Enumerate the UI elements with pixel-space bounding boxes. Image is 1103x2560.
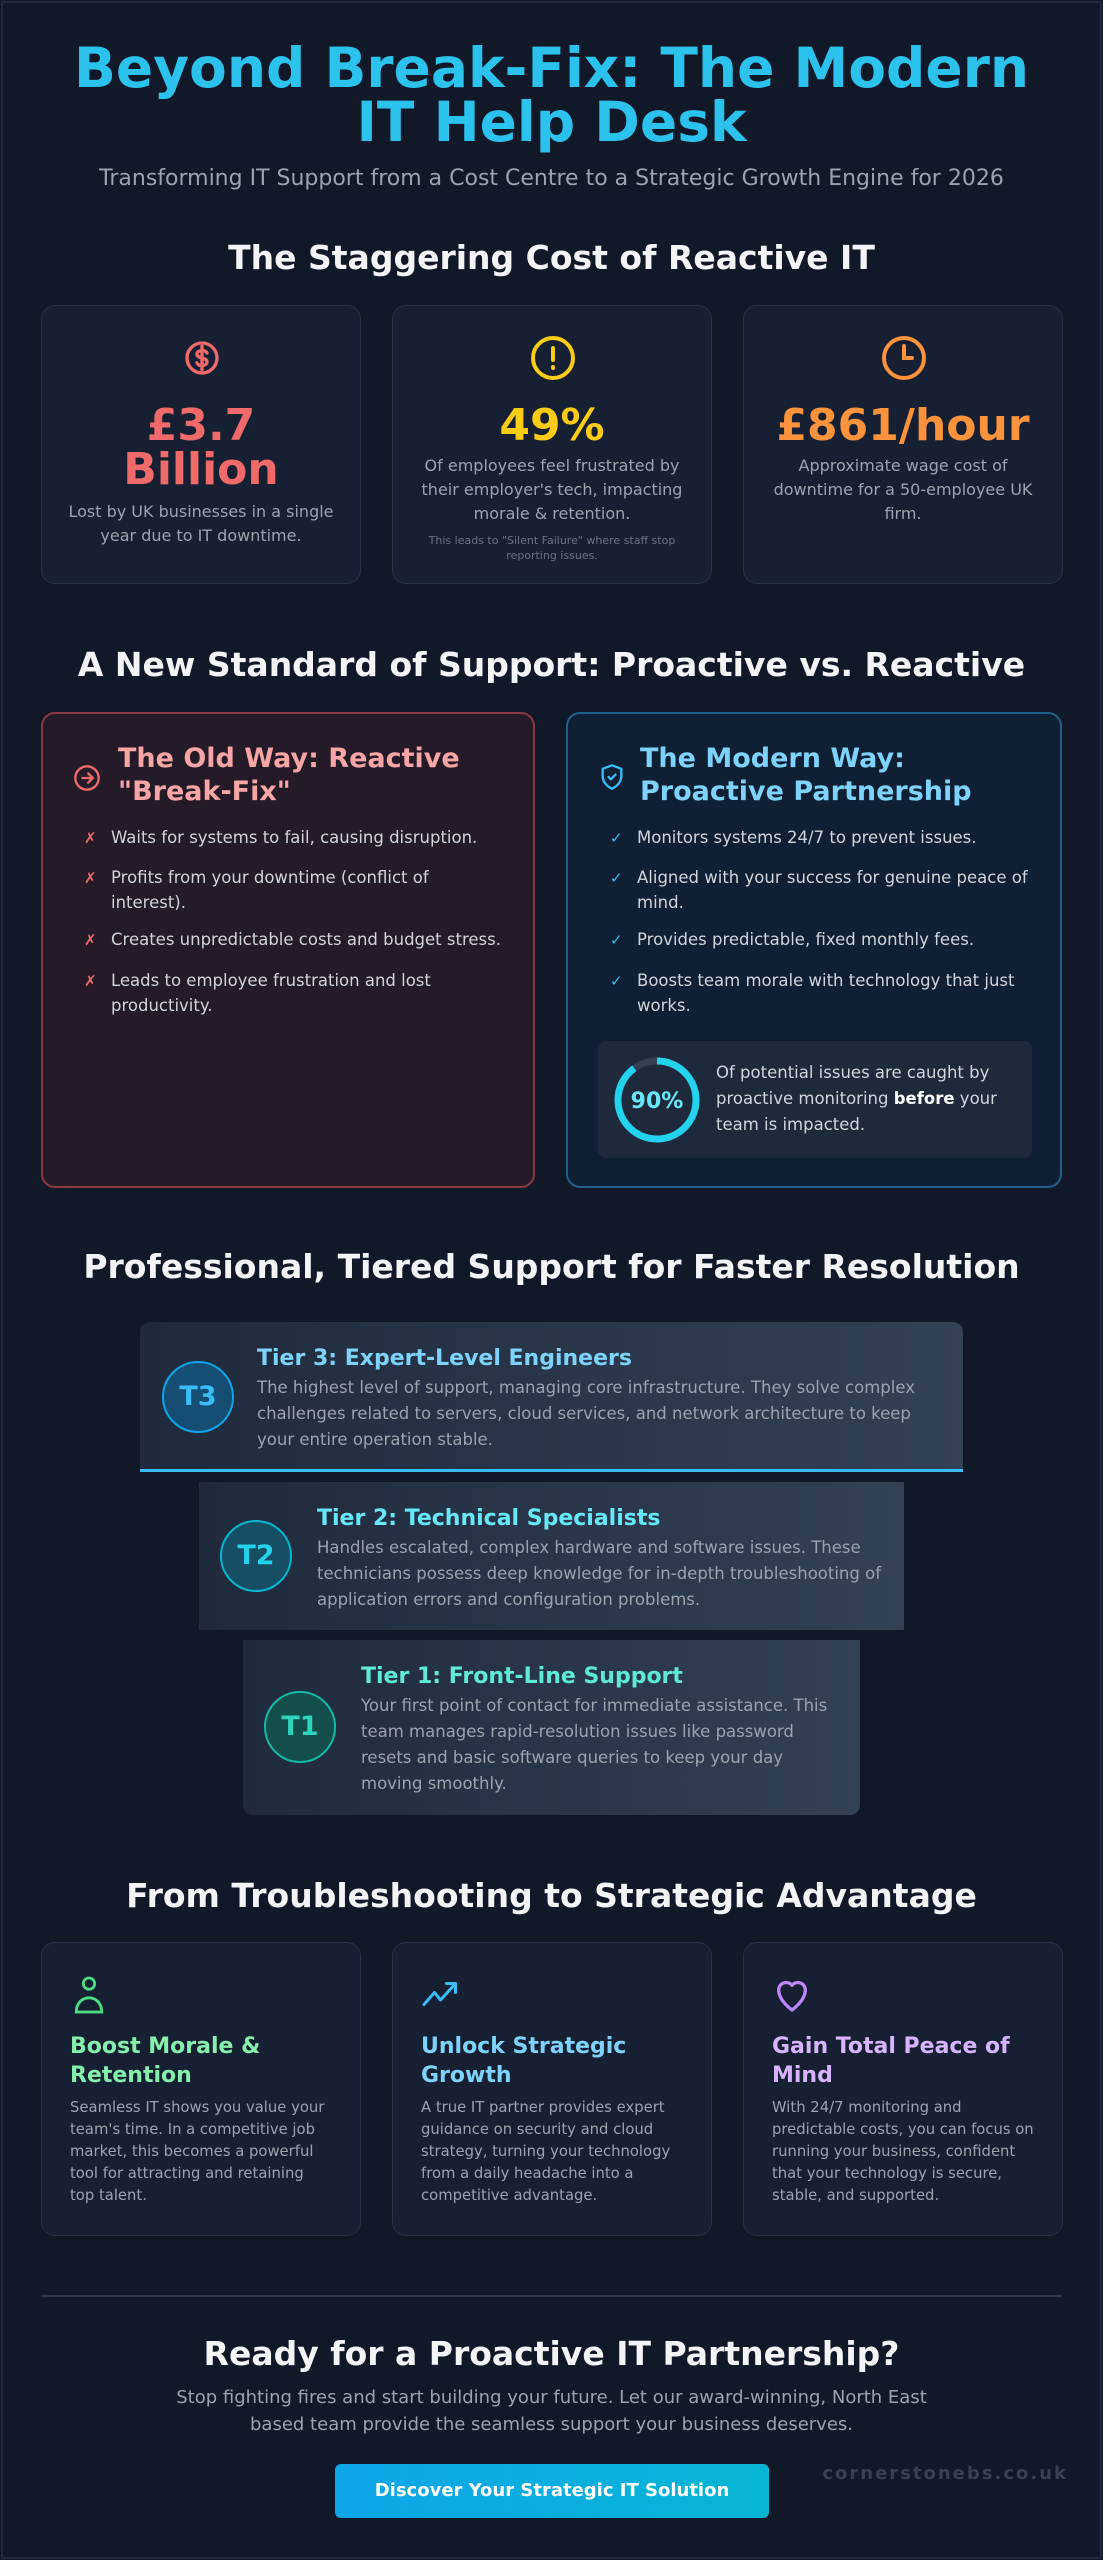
- panel: old way: Leads to employee frustration and lost productivity.: [111, 971, 431, 1015]
- panel: modern way: ✓: [610, 972, 623, 990]
- tier 1: T1: [281, 1711, 319, 1742]
- panel: old way: ✗: [84, 972, 97, 990]
- heading: strategic advantage: From Troubleshooting to Strategic Advantage: [126, 1876, 977, 1915]
- subtitle: Transforming IT Support from a Cost Centre to a Strategic Growth Engine for 2026: [99, 166, 1004, 191]
- benefit card: peace of mind: Mind: [772, 2063, 833, 2088]
- benefit card: growth: [392, 1942, 712, 2236]
- tier 3: [140, 1322, 963, 1472]
- CTA button: Discover Your Strategic IT Solution: [375, 2480, 729, 2501]
- tier 3: T3: [179, 1381, 217, 1412]
- title: IT Help Desk: [356, 90, 747, 154]
- benefit card: peace of mind: Gain Total Peace of: [772, 2034, 1010, 2059]
- panel: old way: [41, 712, 535, 1188]
- tier 2: Handles escalated, complex hardware and software issues. These technicians possess deep knowledge for in-depth troubleshooting of application errors and configuration problems.: [317, 1538, 881, 1609]
- title: Beyond Break-Fix: The Modern: [74, 36, 1029, 100]
- tier 1: Your first point of contact for immediate assistance. This team manages rapid-resolution issues like password resets and basic software queries to keep your day moving smoothly.: [361, 1696, 827, 1793]
- panel: old way: Waits for systems to fail, causing disruption.: [111, 828, 477, 847]
- benefit card: growth: Unlock Strategic: [421, 2034, 626, 2059]
- footer: website: cornerstonebs.co.uk: [822, 2463, 1068, 2484]
- stat card: 49%: This leads to "Silent Failure" where staff stop reporting issues.: [429, 534, 675, 562]
- chart: 90% ring: [614, 1058, 700, 1142]
- tier 2: [199, 1482, 904, 1630]
- icon: arrow circle: [74, 765, 100, 791]
- stat card: 49%: Of employees feel frustrated by their employer's tech, impacting morale & retention.: [422, 456, 682, 523]
- stat card: 3.7 billion: Lost by UK businesses in a single year due to IT downtime.: [68, 502, 334, 545]
- panel: old way: ✗: [84, 869, 97, 887]
- benefit card: morale: Seamless IT shows you value your team's time. In a competitive job market, this becomes a powerful tool for attracting and retaining top talent.: [70, 2099, 324, 2204]
- benefit card: morale: [41, 1942, 361, 2236]
- stat card: 49%: 49%: [499, 400, 605, 451]
- stat card: 3.7 billion: [41, 305, 361, 584]
- heading: cost of reactive IT: The Staggering Cost of Reactive IT: [228, 238, 875, 277]
- title: [74, 36, 1029, 154]
- panel: modern way: Monitors systems 24/7 to prevent issues.: [637, 828, 977, 847]
- stat card: 861/hour: £861/hour: [776, 400, 1030, 451]
- tier 2: Tier 2: Technical Specialists: [317, 1506, 660, 1531]
- panel: modern way: Proactive Partnership: [640, 776, 972, 807]
- CTA text: Stop fighting fires and start building your future. Let our award-winning, North East based team provide the seamless support your business deserves.: [176, 2387, 927, 2435]
- stat card: 861/hour: Approximate wage cost of downtime for a 50-employee UK firm.: [774, 456, 1032, 523]
- benefit card: growth: A true IT partner provides expert guidance on security and cloud strategy, turning your technology from a daily headache into a competitive advantage.: [421, 2099, 670, 2204]
- stat card: 49%: [392, 305, 712, 584]
- icon: alert: [531, 336, 575, 380]
- panel: modern way: ✓: [610, 829, 623, 847]
- chart: 90% ring: 90%: [631, 1089, 683, 1114]
- panel: old way: Creates unpredictable costs and budget stress.: [111, 930, 501, 949]
- panel: modern way: Aligned with your success for genuine peace of mind.: [637, 868, 1028, 912]
- CTA button: [335, 2464, 769, 2518]
- panel: modern way: The Modern Way:: [640, 743, 905, 774]
- panel: modern way: ✓: [610, 931, 623, 949]
- icon: person: [74, 1976, 104, 2014]
- tier 1: [243, 1640, 860, 1815]
- panel: modern way: [566, 712, 1062, 1188]
- panel: old way: The Old Way: Reactive: [118, 743, 460, 774]
- stat card: 3.7 billion: Billion: [123, 444, 279, 495]
- tier 2: T2: [237, 1540, 275, 1571]
- panel: old way: ✗: [84, 931, 97, 949]
- panel: old way: Profits from your downtime (conflict of interest).: [111, 868, 429, 912]
- CTA heading: Ready for a Proactive IT Partnership?: [204, 2334, 899, 2373]
- benefit card: peace of mind: With 24/7 monitoring and predictable costs, you can focus on running your business, confident that your technology is secure, stable, and supported.: [772, 2099, 1034, 2204]
- icon: trend: [422, 1982, 458, 2006]
- benefit card: peace of mind: [743, 1942, 1063, 2236]
- stat card: 861/hour: [743, 305, 1063, 584]
- tier 3: Tier 3: Expert-Level Engineers: [257, 1346, 632, 1371]
- callout: 90%: [598, 1041, 1032, 1158]
- tier 3: The highest level of support, managing core infrastructure. They solve complex challenges related to servers, cloud services, and network architecture to keep your entire operation stable.: [257, 1378, 915, 1449]
- icon: dollar: [185, 341, 219, 375]
- heading: proactive vs reactive: A New Standard of Support: Proactive vs. Reactive: [78, 645, 1025, 684]
- panel: modern way: Provides predictable, fixed monthly fees.: [637, 930, 974, 949]
- icon: heart: [777, 1980, 807, 2012]
- stat card: 3.7 billion: £3.7: [147, 400, 255, 451]
- tier 1: Tier 1: Front-Line Support: [361, 1664, 683, 1689]
- icon: clock: [882, 336, 926, 380]
- callout: 90%: Of potential issues are caught by proactive monitoring before your team is impacted.: [716, 1063, 997, 1134]
- benefit card: growth: Growth: [421, 2063, 512, 2088]
- panel: modern way: ✓: [610, 869, 623, 887]
- panel: modern way: Boosts team morale with technology that just works.: [637, 971, 1014, 1015]
- panel: old way: ✗: [84, 829, 97, 847]
- benefit card: morale: Retention: [70, 2063, 192, 2088]
- benefit card: morale: Boost Morale &: [70, 2034, 260, 2059]
- icon: shield: [602, 764, 622, 790]
- heading: tiered support: Professional, Tiered Support for Faster Resolution: [83, 1247, 1020, 1286]
- panel: old way: "Break-Fix": [118, 776, 291, 807]
